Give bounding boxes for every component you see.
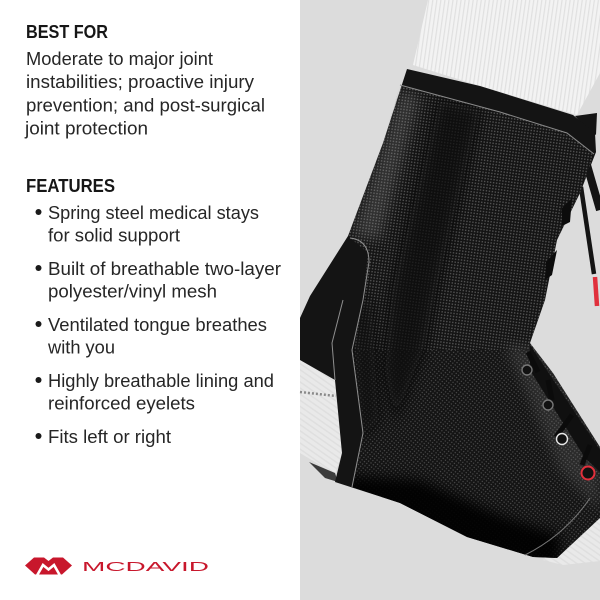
sock: upper leg bbox=[413, 0, 600, 115]
logo: McDavid bbox=[25, 558, 209, 576]
text block: best for description bbox=[24, 48, 265, 138]
photo panel: ankle brace on grey background bbox=[300, 0, 600, 600]
feature: fits left or right: Fits left or right bbox=[48, 426, 171, 447]
feature: lining and eyelets: reinforced eyelets bbox=[48, 392, 195, 414]
hanging lace with red tip bbox=[581, 165, 600, 306]
features list bbox=[36, 202, 281, 447]
logo wordmark: MCDAVID bbox=[82, 560, 209, 574]
feature: spring steel stays bbox=[36, 202, 259, 246]
binding stitch line bbox=[400, 85, 594, 154]
strap stitch lines bbox=[332, 238, 369, 487]
front edge lacing bbox=[528, 198, 600, 472]
brace silhouette with tongue and strap bbox=[300, 69, 600, 558]
white text panel background bbox=[0, 0, 300, 600]
eyelets bbox=[522, 365, 594, 480]
heading: best for: BEST FOR bbox=[26, 21, 108, 42]
feature: spring steel stays: Spring steel medical stays bbox=[48, 202, 259, 223]
feature: ventilated tongue: with you bbox=[47, 336, 115, 358]
bottom front stitch line bbox=[525, 498, 590, 555]
bright side highlight bbox=[505, 345, 600, 510]
feature: ventilated tongue: Ventilated tongue breathes bbox=[48, 314, 267, 335]
feature: breathable mesh bbox=[36, 258, 281, 302]
sock: heel bbox=[300, 360, 342, 474]
feature: lining and eyelets bbox=[36, 370, 274, 414]
feature: ventilated tongue bbox=[36, 314, 267, 358]
brace mesh body bbox=[340, 80, 600, 570]
flap under the heel bbox=[309, 462, 338, 482]
text block: best for description: prevention; and post-surgical bbox=[26, 94, 265, 116]
sock: toe bbox=[543, 505, 600, 565]
text block: best for description: joint protection bbox=[24, 118, 148, 138]
back tab of brace bbox=[575, 113, 597, 135]
icon: McDavid shield mark bbox=[25, 558, 72, 576]
dark lower shading bbox=[345, 475, 560, 570]
feature: spring steel stays: for solid support bbox=[48, 224, 180, 246]
feature: breathable mesh: Built of breathable two-layer bbox=[48, 258, 281, 279]
feature: lining and eyelets: Highly breathable lining and bbox=[48, 370, 274, 391]
dark vertical stay band bbox=[385, 100, 480, 420]
heading: features: FEATURES bbox=[26, 175, 115, 196]
text block: best for description: Moderate to major joint bbox=[26, 48, 213, 69]
feature: breathable mesh: polyester/vinyl mesh bbox=[48, 280, 217, 302]
text block: best for description: instabilities; proactive injury bbox=[26, 71, 255, 92]
